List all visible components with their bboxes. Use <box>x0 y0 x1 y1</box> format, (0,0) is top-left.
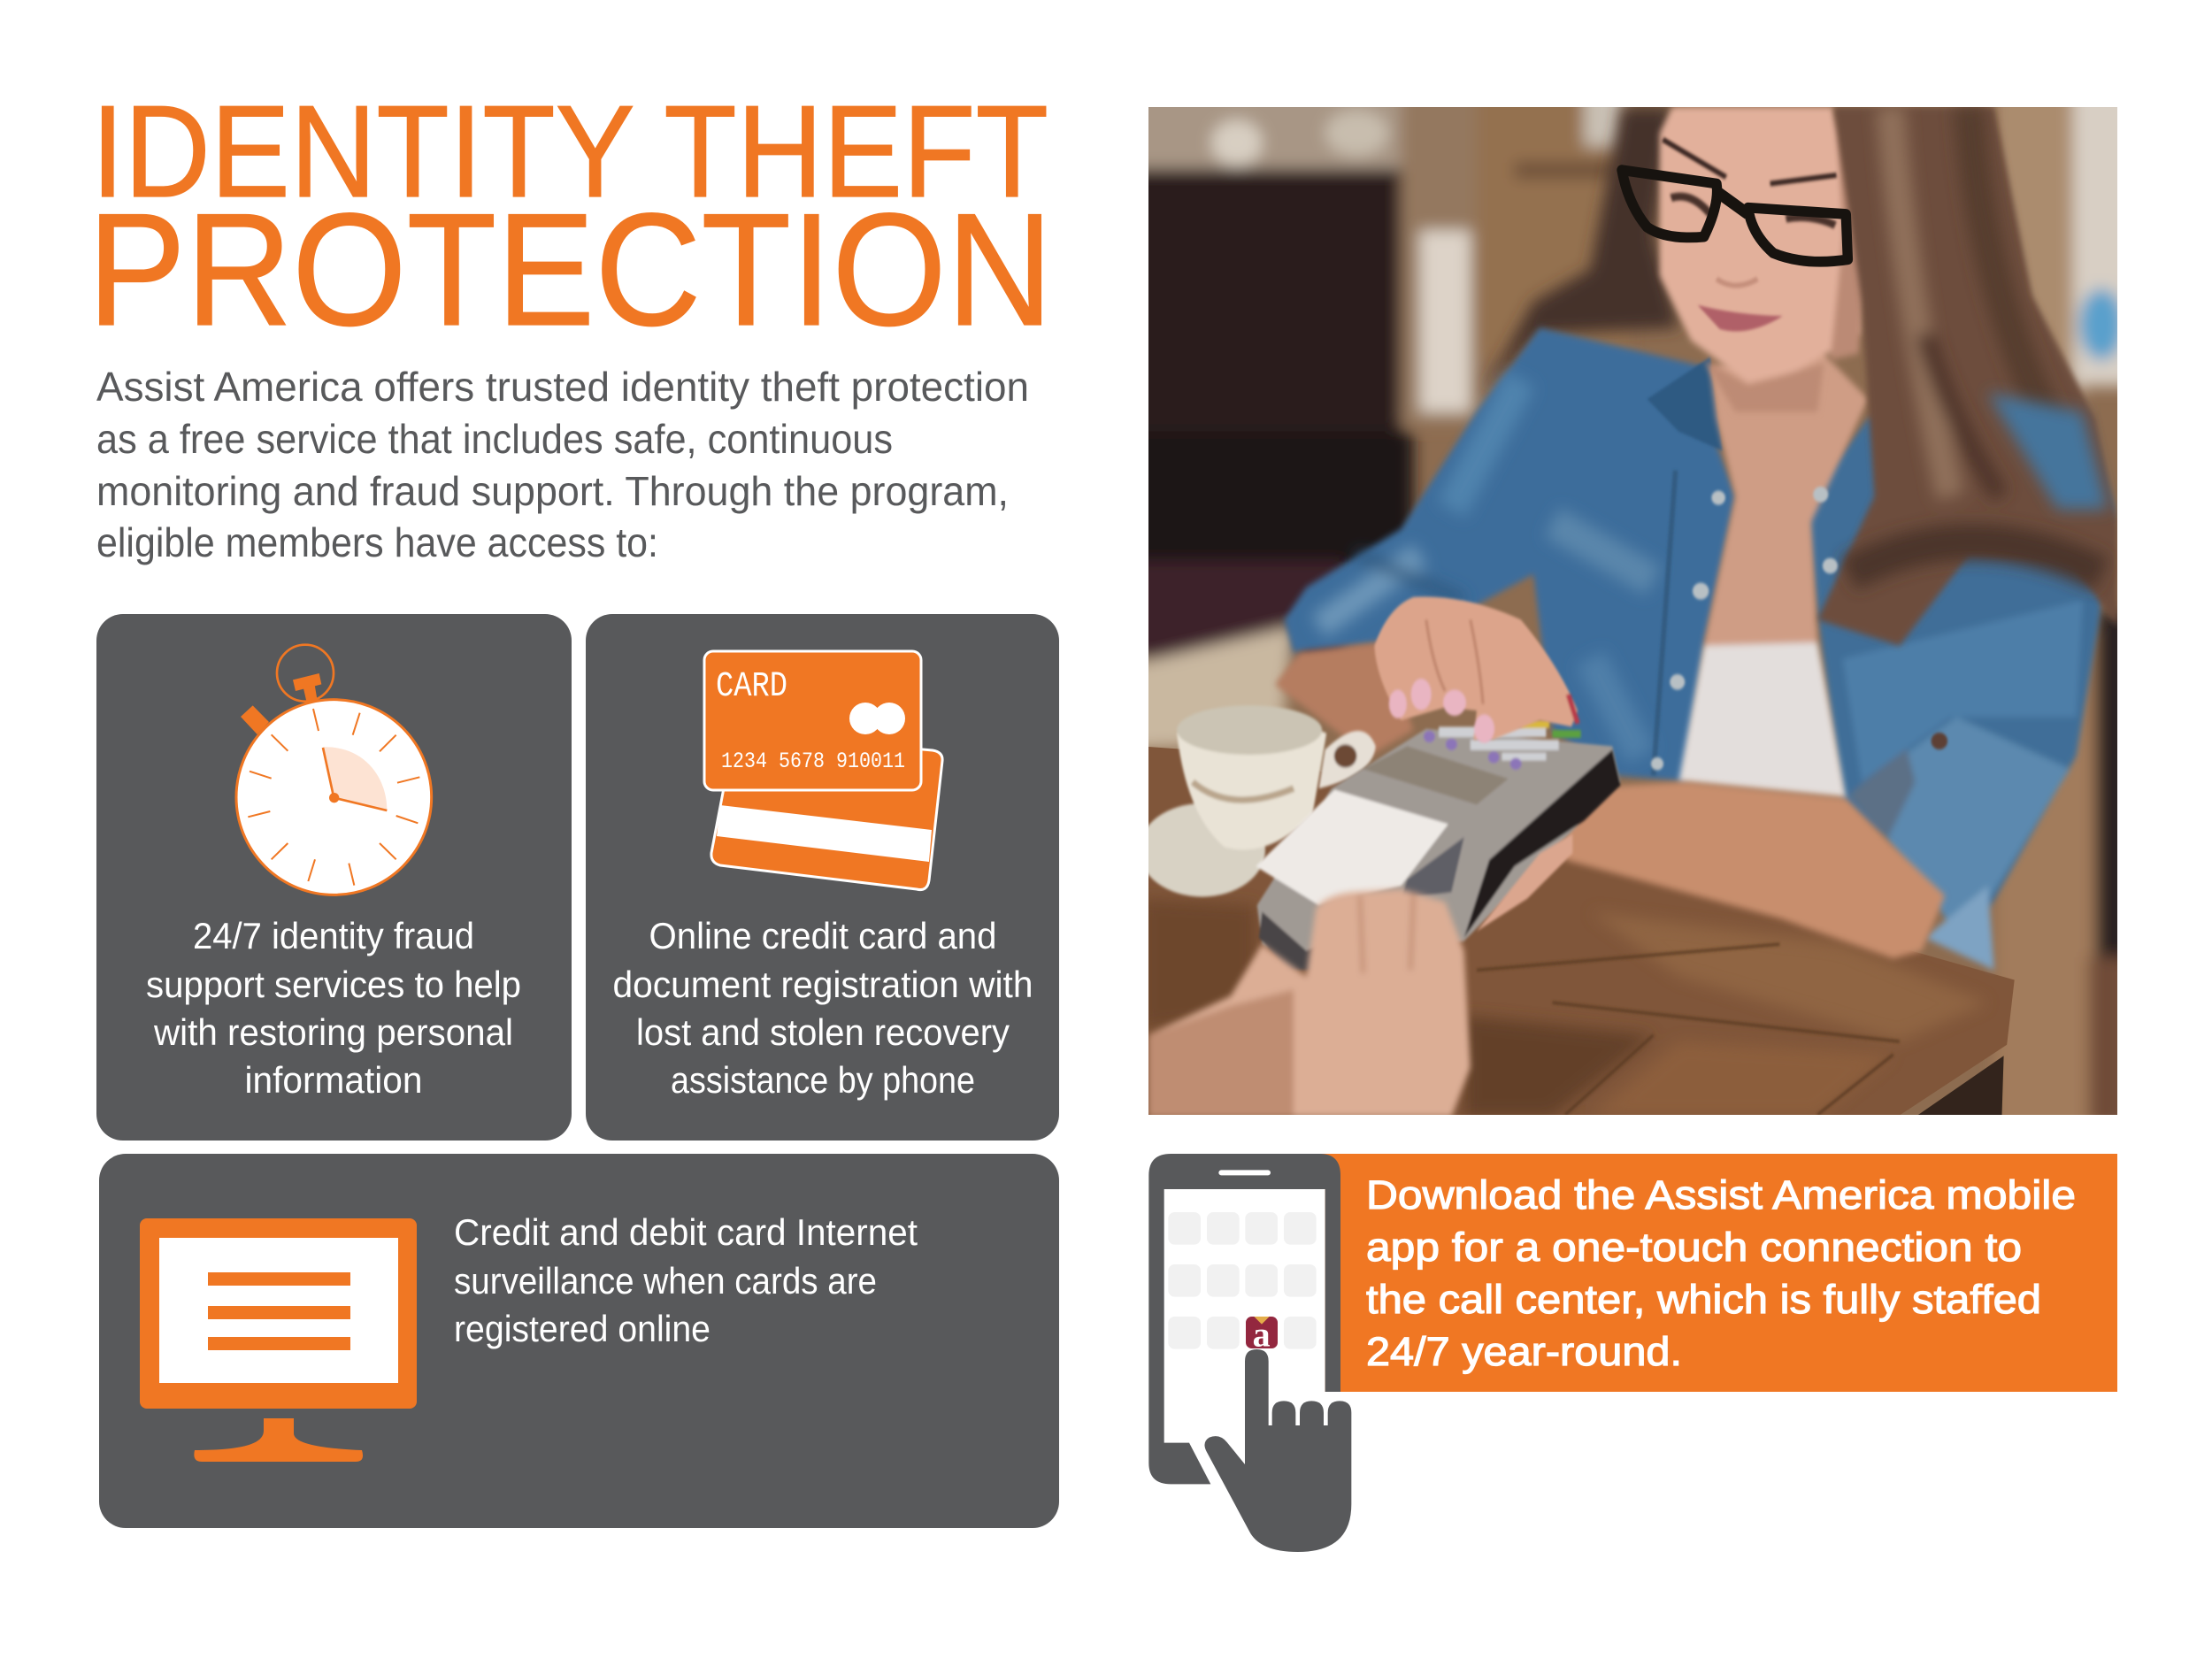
card registration text: lost and stolen recovery <box>636 1011 1010 1053</box>
panel: mobile app callout <box>1148 1154 2117 1552</box>
front hair <box>1817 107 2117 646</box>
fraud support text: with restoring personal <box>153 1011 513 1053</box>
intro paragraph <box>96 364 1029 565</box>
denim shirt <box>1284 327 2114 970</box>
denim shoulder over hair <box>1988 393 2108 510</box>
title line 2: PROTECTION <box>88 180 1053 359</box>
card terminal <box>1256 720 1621 970</box>
chest and top <box>1678 347 1868 798</box>
right forearm <box>1275 642 1945 958</box>
icon: credit cards <box>704 651 942 890</box>
panel: fraud support <box>96 614 572 1141</box>
fraud support text: support services to help <box>146 964 521 1005</box>
coffee cup and saucer <box>1139 705 1376 897</box>
surveillance text: surveillance when cards are <box>454 1260 877 1302</box>
card registration text <box>612 915 1033 1101</box>
panel: internet surveillance <box>99 1154 1059 1528</box>
callout banner <box>1318 1154 2117 1392</box>
intro paragraph: Assist America offers trusted identity theft protection <box>96 364 1029 410</box>
callout text <box>1366 1172 2076 1374</box>
card registration text: document registration with <box>612 964 1033 1005</box>
app icon <box>1246 1314 1278 1354</box>
photo: woman paying at card terminal <box>1148 107 2117 1115</box>
table <box>1142 746 2015 1119</box>
callout text: Download the Assist America mobile <box>1366 1172 2076 1217</box>
surveillance text: registered online <box>454 1308 710 1349</box>
title line 1: IDENTITY THEFT <box>91 79 1048 225</box>
hands <box>1374 596 1578 931</box>
title <box>88 79 1053 359</box>
app icon: a <box>1253 1314 1271 1354</box>
woman's back hair <box>1483 107 1678 393</box>
icon: credit cards: 1234 5678 910011 <box>721 749 905 774</box>
fraud support text: information <box>244 1059 423 1101</box>
card registration text: assistance by phone <box>671 1059 975 1101</box>
face <box>1660 107 1865 412</box>
icon: credit cards: CARD <box>716 667 787 707</box>
callout text: 24/7 year-round. <box>1366 1329 1682 1374</box>
shirt buttons <box>1651 487 1947 771</box>
intro paragraph: monitoring and fraud support. Through the program, <box>96 468 1009 514</box>
callout text: the call center, which is fully staffed <box>1366 1277 2041 1322</box>
intro paragraph: eligible members have access to: <box>96 519 658 565</box>
panel: card registration <box>586 614 1059 1141</box>
glasses <box>1622 170 1847 262</box>
fraud support text <box>146 915 521 1101</box>
surveillance text: Credit and debit card Internet <box>454 1211 918 1253</box>
icon: phone and pointing hand <box>1148 1154 1352 1552</box>
intro paragraph: as a free service that includes safe, continuous <box>96 416 893 462</box>
icon: stopwatch <box>236 645 432 895</box>
card registration text: Online credit card and <box>649 915 996 956</box>
icon: monitor <box>140 1218 417 1462</box>
callout text: app for a one-touch connection to <box>1366 1225 2022 1270</box>
surveillance text <box>454 1211 918 1349</box>
fraud support text: 24/7 identity fraud <box>193 915 474 956</box>
face details <box>1663 140 1837 332</box>
